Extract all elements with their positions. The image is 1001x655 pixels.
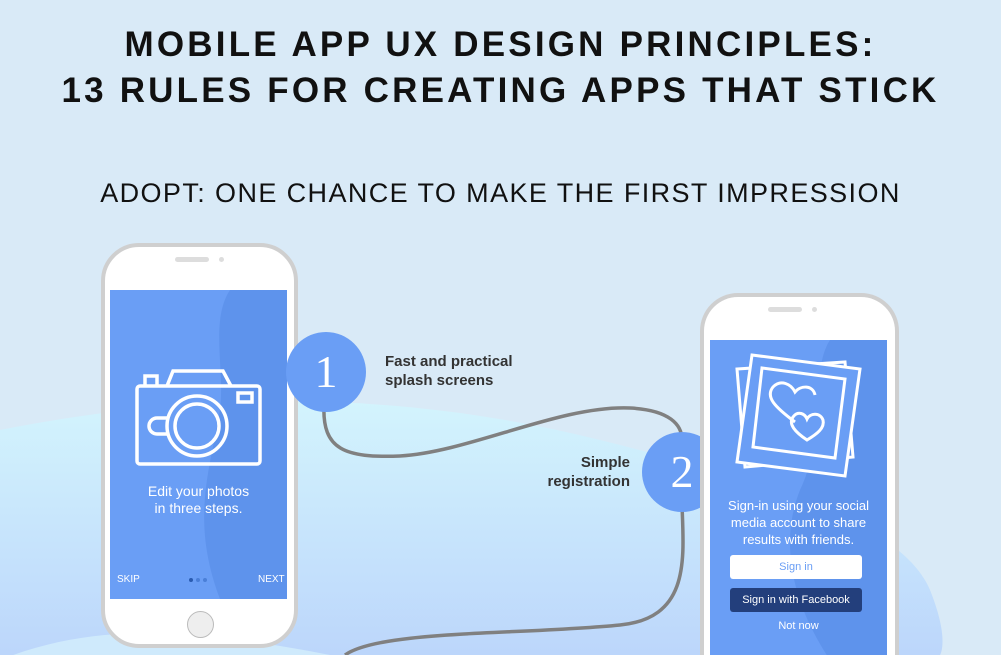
title: 13 RULES FOR CREATING APPS THAT STICK [61, 71, 940, 110]
phone 2 [700, 293, 899, 655]
home button [187, 611, 214, 638]
icon: camera [135, 369, 262, 466]
screen 2 text: media account to share [731, 515, 866, 530]
screen 1 [110, 290, 287, 599]
screen 2 text: results with friends. [743, 532, 854, 547]
button: facebook [730, 588, 862, 612]
subtitle: ADOPT: ONE CHANCE TO MAKE THE FIRST IMPRESSION [100, 178, 901, 208]
step 1 circle: 1 [314, 346, 338, 397]
step 2 label: Simple [581, 454, 630, 471]
phone 1 [101, 243, 298, 648]
title [61, 25, 940, 110]
step 1 label [385, 353, 513, 389]
not now: Not now [778, 620, 819, 632]
screen text [148, 483, 249, 516]
screen text: Edit your photos [148, 483, 249, 499]
step 1 label: splash screens [385, 372, 493, 389]
screen text: in three steps. [155, 500, 242, 516]
screen 1: NEXT [258, 574, 285, 585]
step 2 circle [642, 432, 722, 512]
screen 1: SKIP [117, 574, 140, 585]
screen 2 text: Sign-in using your social [728, 498, 869, 513]
screen 2 [710, 340, 887, 655]
button: facebook: Sign in with Facebook [742, 594, 850, 606]
button: sign in [730, 555, 862, 579]
button: sign in: Sign in [779, 561, 813, 573]
screen 2 text [728, 498, 869, 547]
title: MOBILE APP UX DESIGN PRINCIPLES: [125, 25, 876, 64]
step 2 label: registration [547, 473, 630, 490]
icon: photos with hearts [735, 353, 862, 478]
step 2 label [547, 454, 630, 490]
step 2 circle: 2 [670, 446, 694, 497]
step 1 circle [286, 332, 366, 412]
step 1 label: Fast and practical [385, 353, 513, 370]
